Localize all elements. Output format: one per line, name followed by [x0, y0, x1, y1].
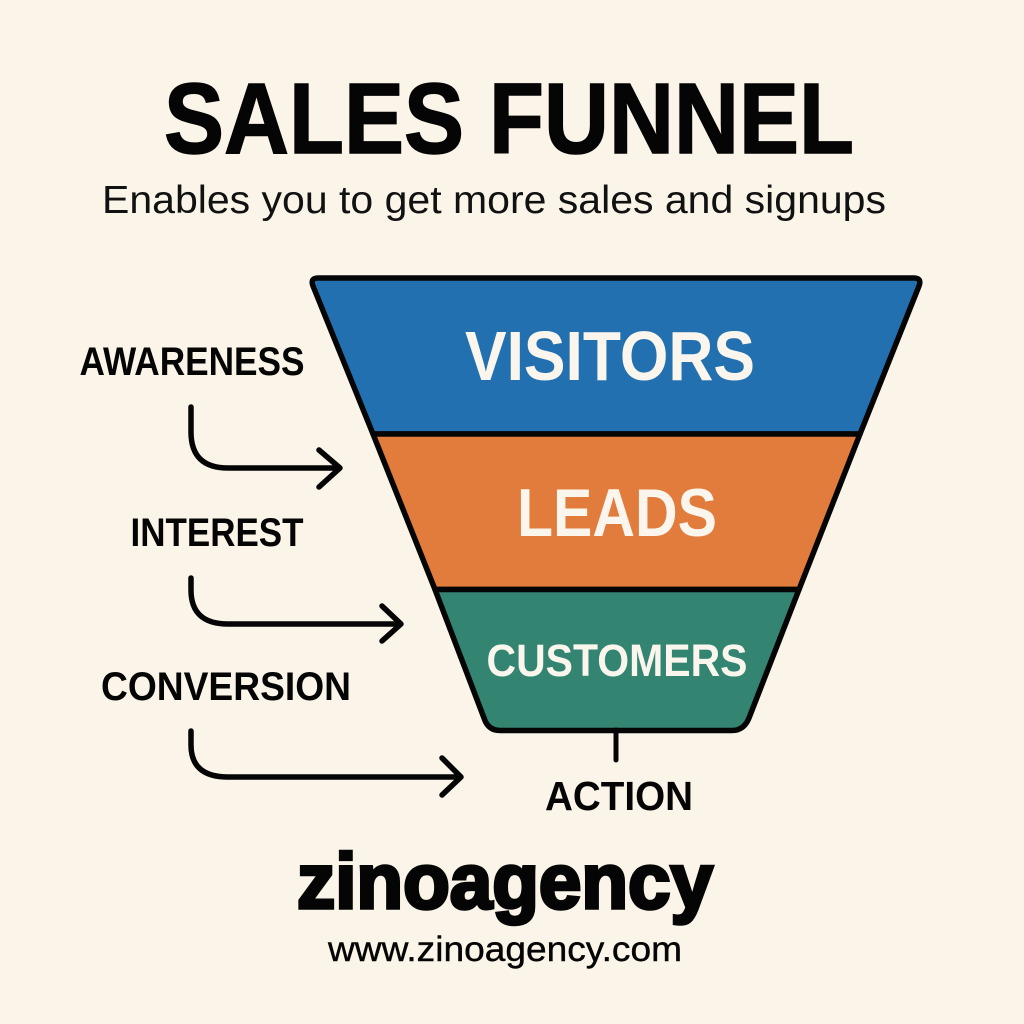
subtitle: Enables you to get more sales and signups	[102, 179, 886, 222]
funnel tier: customers	[435, 590, 799, 730]
title: SALES FUNNEL	[164, 63, 854, 175]
funnel tier: leads	[373, 434, 860, 590]
funnel tier: leads: LEADS	[517, 475, 717, 551]
arrow: conversion	[191, 731, 461, 795]
label: awareness: AWARENESS	[80, 340, 304, 384]
funnel spout line	[614, 730, 618, 760]
arrow: interest	[191, 578, 401, 641]
label: action: ACTION	[545, 773, 693, 819]
arrow: awareness	[191, 407, 340, 487]
funnel tier: visitors	[312, 278, 920, 434]
funnel tier: customers: CUSTOMERS	[486, 635, 748, 686]
website url: www.zinoagency.com	[327, 930, 682, 969]
label: interest: INTEREST	[130, 511, 304, 555]
brand logo text: zinoagency	[297, 837, 713, 925]
label: conversion: CONVERSION	[101, 665, 351, 709]
funnel tier: visitors: VISITORS	[465, 317, 755, 395]
funnel	[312, 278, 920, 730]
